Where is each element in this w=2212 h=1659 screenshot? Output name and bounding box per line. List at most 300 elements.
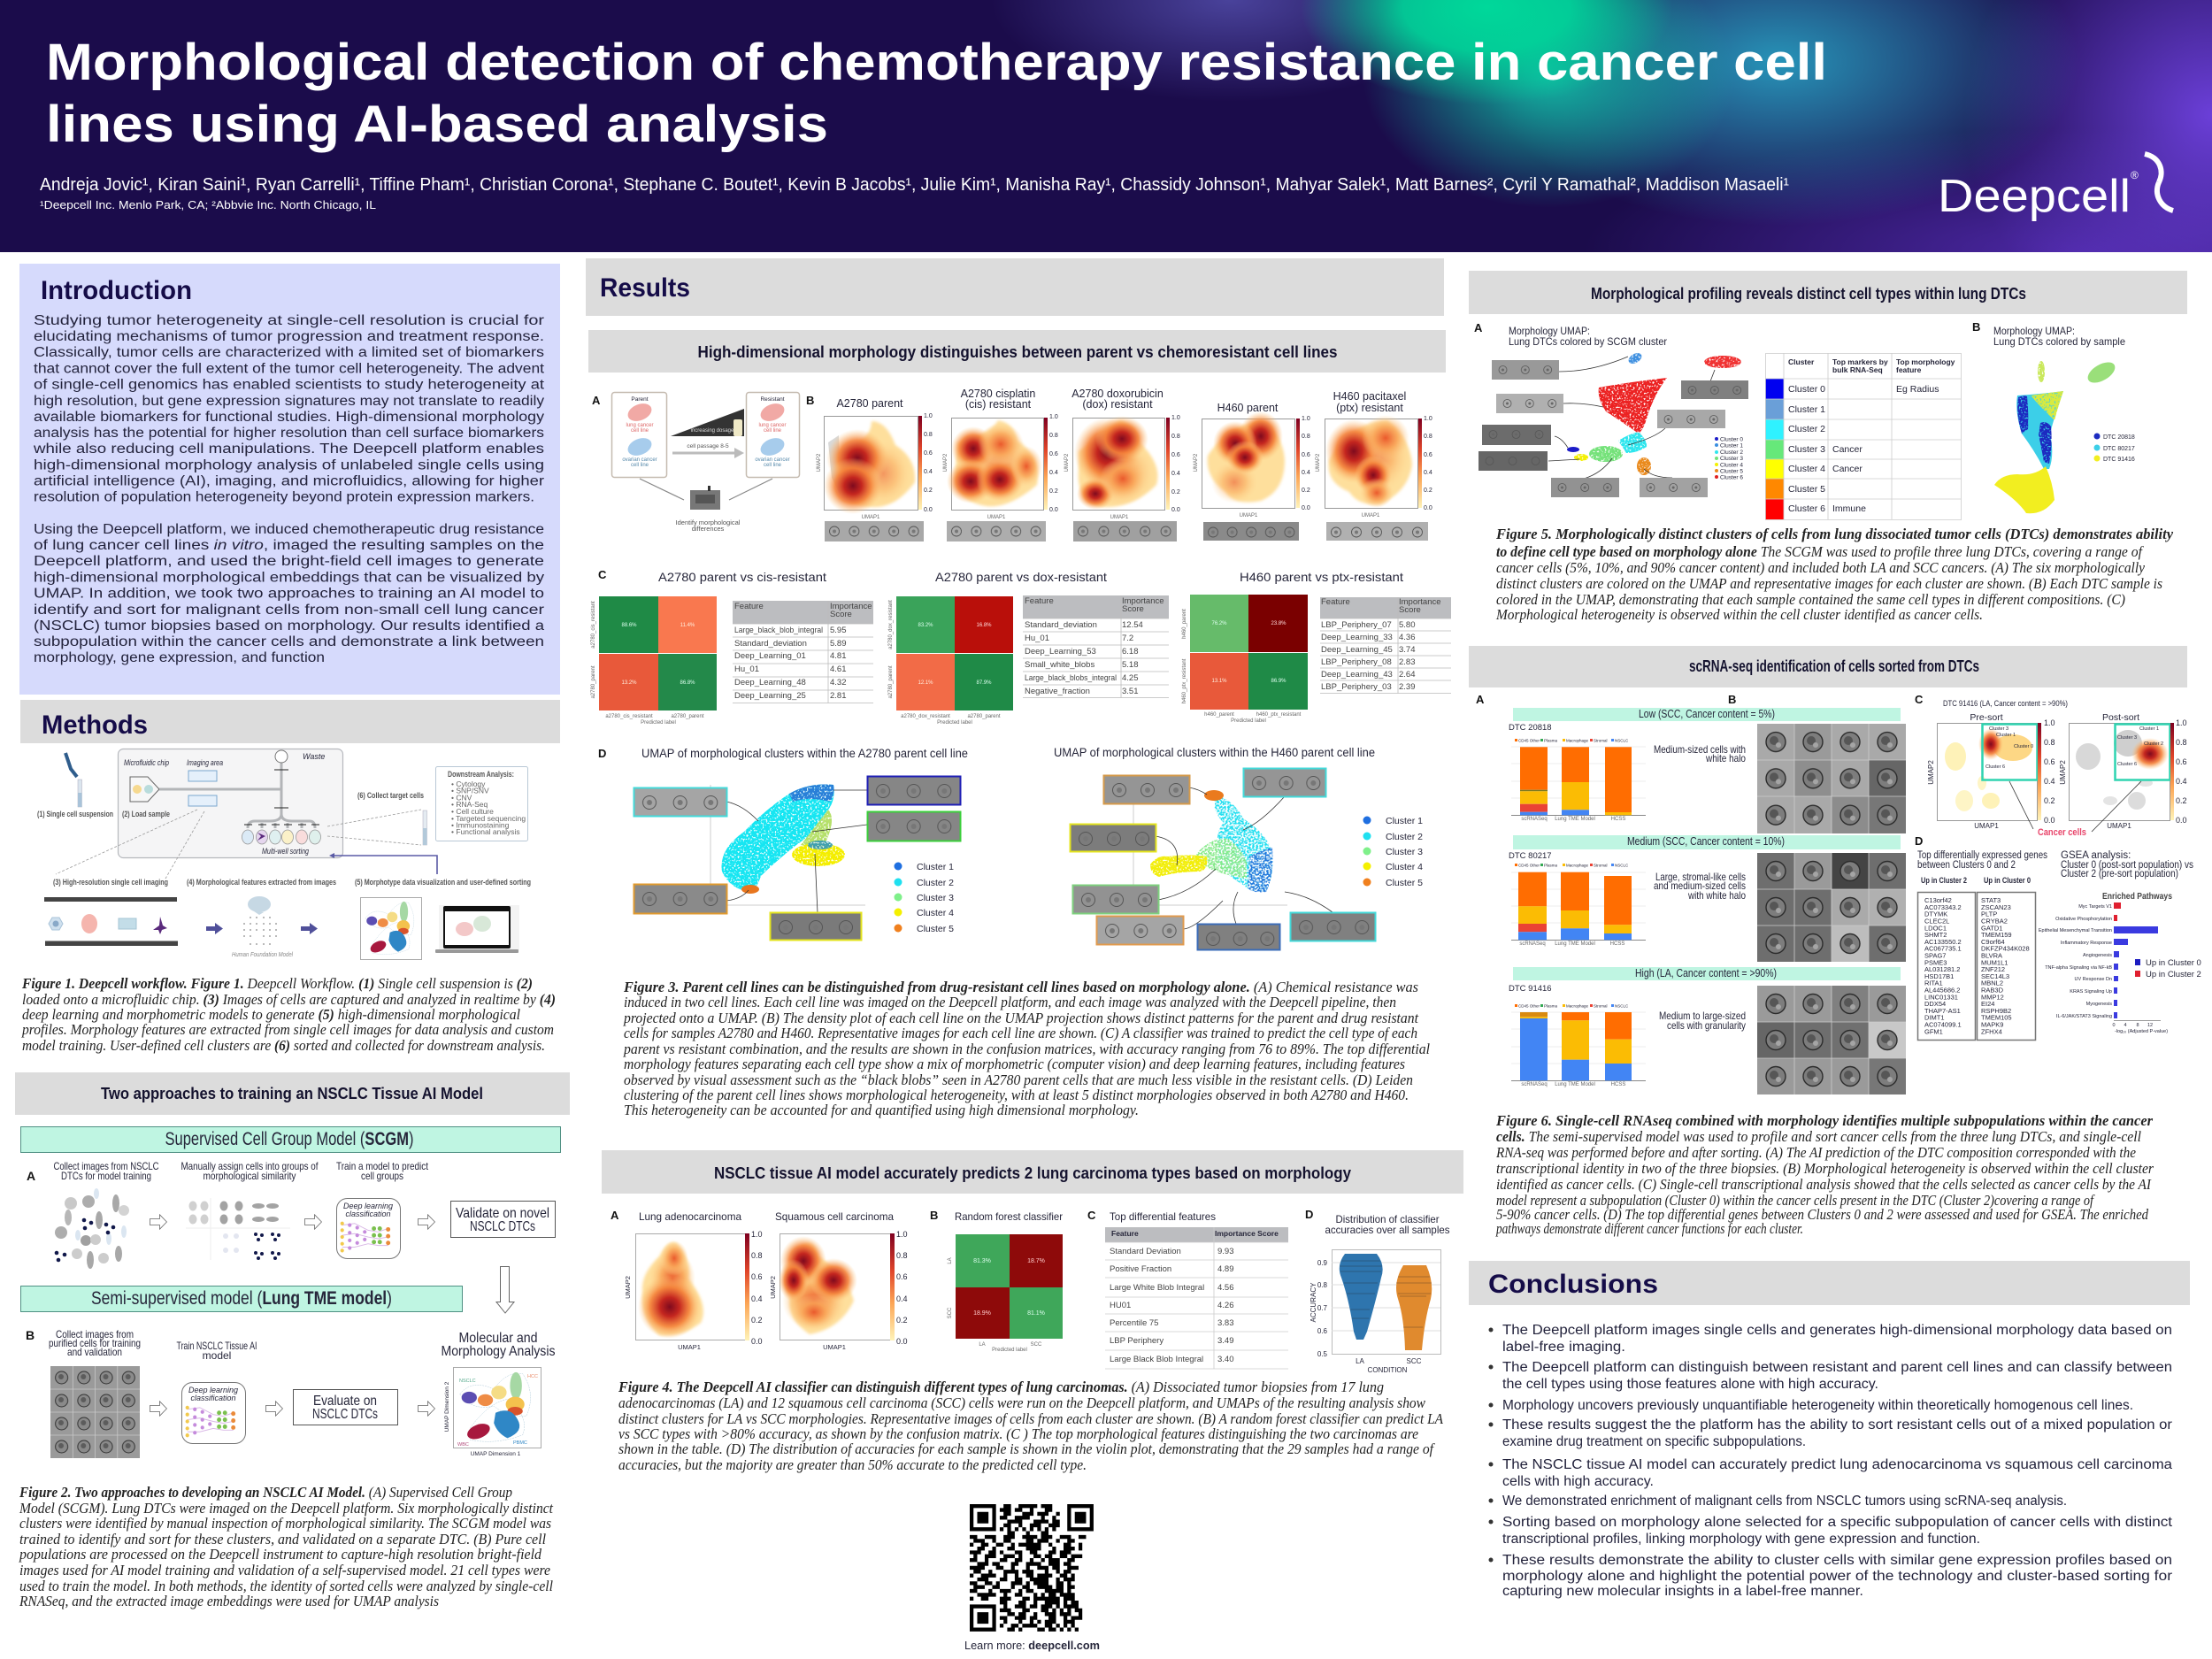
microfluidic chip: Microfluidic chip: [124, 758, 169, 767]
text block: conclusions: Sorting based on morphology alone selected for a specific subpopulation of cancer cells with distinct: [1502, 1515, 2173, 1530]
band: high-dimensional morphology: High-dimensional morphology distinguishes between parent vs chemoresistant cell lines: [697, 343, 1338, 361]
step captions B: [49, 1328, 556, 1362]
density: pre-sort: Cluster 3: [1989, 726, 2008, 732]
microfluidic chip: Imaging area: [187, 758, 223, 767]
gene list: cluster 0: [1977, 892, 2035, 1041]
panel D: violin plot: SCC: [1407, 1357, 1422, 1365]
scatter: A2780: [710, 784, 867, 913]
band: morphological profiling: [1469, 271, 2187, 314]
feature table 2: Score: [1122, 604, 1144, 614]
legend: H460: Cluster 3: [1386, 847, 1423, 857]
icon: brain and model: [232, 896, 293, 958]
text block: introduction: Deepcell platform, and used the bright-field cell images to generate: [34, 554, 544, 569]
feature table 2: 12.54: [1122, 620, 1143, 630]
panel C: pre and post sort: Post-sort: [2102, 712, 2139, 723]
feature table 2: 3.51: [1122, 687, 1138, 696]
panel A: density plots: 0.2: [751, 1316, 763, 1325]
panel C: top features table: Importance Score: [1215, 1229, 1279, 1238]
confusion matrix 2: [888, 596, 1013, 726]
panel D: violin plot: 0.7: [1317, 1304, 1328, 1312]
plot: A2780 doxorubicin resistant: (dox) resistant: [1082, 398, 1153, 411]
downstream analysis box: [435, 766, 527, 841]
gene list: cluster 0: PLTP: [1981, 910, 1997, 918]
panel C: top features table: 9.93: [1217, 1247, 1233, 1256]
legend: H460: Cluster 5: [1386, 878, 1423, 888]
row: low cancer content: CD45 Other: [1518, 738, 1540, 743]
panel C: top features table: Positive Fraction: [1110, 1264, 1171, 1274]
text block: introduction: high resolution, but gene expression signatures may not translate to readily: [34, 394, 544, 409]
gene list: cluster 2: LINC01331: [1924, 993, 1958, 1001]
caption: figure 3: projected onto a UMAP. (B) The density plot of each cell line on the UMAP projection shows distinct patterns for the parent and drug resistant: [623, 1010, 1418, 1026]
panel D: gene lists and GSEA: Cluster 2 (pre-sort population): [2061, 869, 2178, 879]
validate box: [451, 1202, 556, 1237]
caption: figure 5: Morphological heterogeneity is observed within the cell cluster identified as cancer cells.: [1495, 606, 1983, 623]
density: post-sort: UMAP1: [2107, 822, 2131, 830]
caption: figure 1: deep learning and morphometric models to generate (5) high-dimensional morphological: [22, 1006, 520, 1023]
feature table 2: 6.18: [1122, 647, 1138, 657]
confusion matrix 1: 88.6%: [621, 623, 637, 628]
plot: A2780 doxorubicin resistant: [1064, 388, 1180, 541]
feature table 3: LBP_Periphery_07: [1321, 620, 1392, 630]
gene list: cluster 0: DKFZP434K028: [1981, 945, 2030, 953]
legend: A2780: Cluster 1: [917, 862, 954, 872]
panel D: violin plot: 0.5: [1317, 1350, 1328, 1358]
row: high cancer content: Macrophage: [1566, 1003, 1589, 1009]
plot: A2780 cisplatin resistant: 1.0: [1049, 414, 1058, 420]
scatter: H460: [1133, 787, 1333, 929]
confusion matrix 2: 16.8%: [976, 623, 992, 628]
text block: introduction: UMAP. In addition, we took two approaches to training an AI model to: [34, 587, 544, 602]
confusion matrix 2: a2780_parent: [888, 665, 894, 699]
plot: H460 paclitaxel resistant: H460 pacitaxel: [1333, 390, 1406, 403]
caption: figure 4: shown in the table. (D) The distribution of accuracies for each sample is shown in the violin plot, demonstrating that the 29 samples had a range of: [618, 1440, 1435, 1457]
panel A: density plots: 0.4: [751, 1294, 763, 1303]
density: post-sort: 1.0: [2176, 718, 2187, 727]
plot: H460 paclitaxel resistant: [1316, 390, 1432, 541]
row: low cancer content: HCSS: [1611, 817, 1625, 822]
caption: figure 2: trained to identify and sort for these clusters, and validated on a separate DTC. (B) Pure cell: [19, 1531, 546, 1548]
gene list: cluster 0: MUM1L1: [1981, 958, 2008, 966]
caption: figure 2: Figure 2. Two approaches to developing an NSCLC AI Model. (A) Supervised Cell Group: [19, 1484, 512, 1501]
plot: A2780 parent: UMAP1: [862, 515, 880, 520]
confusion matrix 3: 76.2%: [1211, 621, 1227, 626]
feature table 3: Deep_Learning_45: [1321, 645, 1393, 655]
caption: figure 3: parent vs resistant combination, and the results are shown in the confusion matrices, with accuracy ranging from 76 to 89%. The top differential: [623, 1041, 1430, 1057]
plot: H460 paclitaxel resistant: 1.0: [1424, 416, 1432, 422]
panel labels: [1476, 693, 1924, 848]
figure 3 panel A: resistance schematic: ovarian cancer: [622, 457, 657, 463]
caption: figure 2: populations are processed on the Deepcell instrument to capture-high resolution bright-field: [19, 1546, 542, 1563]
row: medium cancer content: NSCLC: [1615, 864, 1629, 867]
density: post-sort: Cluster 6: [2117, 762, 2137, 767]
confusion matrix 3: h460_parent: [1182, 609, 1187, 639]
panel A: SCGM UMAP: A: [1474, 321, 1483, 334]
panel B: confusion matrix: SCC: [1031, 1342, 1042, 1348]
gene list: cluster 2: DDX54: [1924, 1000, 1946, 1008]
text block: introduction: analysis has the potential for higher resolution than cell surface biomarkers: [34, 426, 544, 441]
downstream analysis box: Downstream Analysis:: [448, 770, 514, 779]
title: [46, 34, 1827, 153]
cell image grid: [50, 1366, 140, 1458]
gene list: cluster 2: LDOC1: [1924, 924, 1947, 932]
confusion matrix 1: [591, 596, 717, 726]
panel B: confusion matrix: 18.7%: [1027, 1258, 1045, 1264]
umap plot: WBC: [457, 1442, 469, 1448]
text block: introduction: of single-cell genomics has enabled scientists to study heterogeneity at: [34, 378, 545, 393]
panel A: SCGM UMAP: Morphology UMAP:: [1509, 325, 1590, 337]
panel A: density plots: UMAP1: [678, 1343, 701, 1351]
arrow: [418, 1215, 435, 1229]
row: high cancer content: CD45 Other: [1518, 1003, 1540, 1009]
legend: H460: Cluster 1: [1386, 816, 1423, 826]
text block: conclusions: The Deepcell platform can distinguish between resistant and parent cell lines and can classify between: [1502, 1360, 2172, 1375]
plot: A2780 cisplatin resistant: [943, 388, 1058, 541]
callout: cancer cells: [2009, 781, 2141, 838]
gene list: cluster 2: DIMT1: [1924, 1014, 1945, 1022]
row: low cancer content: DTC 20818: [1509, 723, 1552, 733]
row: medium cancer content: and medium-sized cells: [1654, 879, 1746, 892]
panel B: sample UMAP: Lung DTCs colored by sample: [1993, 335, 2125, 348]
feature table 2: Feature: [1025, 596, 1054, 606]
panel C: top features table: Large White Blob Integral: [1110, 1283, 1204, 1293]
confusion matrix 3: Predicted label: [1231, 718, 1266, 724]
caption: figure 3: [623, 979, 1430, 1118]
panel B: confusion matrix: B: [930, 1209, 938, 1222]
plot: A2780 cisplatin resistant: UMAP2: [943, 453, 949, 472]
chart: enriched pathways: Myogenesis: [2086, 1002, 2112, 1007]
gene list: cluster 2: CLEC2L: [1924, 917, 1949, 926]
confusion matrix 2: Predicted label: [937, 720, 972, 726]
row: high cancer content: NSCLC: [1615, 1003, 1629, 1009]
title: lines using AI-based analysis: [46, 96, 828, 153]
feature table 3: Importance: [1399, 597, 1441, 607]
panel B: sample UMAP: Morphology UMAP:: [1993, 325, 2075, 337]
chart: enriched pathways: Up in Cluster 2: [2146, 970, 2201, 979]
umap plot: [444, 1368, 541, 1457]
plot: H460 paclitaxel resistant: 0.0: [1424, 505, 1432, 511]
panel B: confusion matrix: 18.9%: [973, 1310, 991, 1317]
panel B: sample UMAP: B: [1972, 320, 1980, 334]
plot: A2780 parent: 0.0: [924, 507, 933, 513]
legend: H460: Cluster 4: [1386, 862, 1423, 872]
figure 3 panel A: resistance schematic: ovarian cancer: [755, 457, 790, 463]
cluster table: Immune: [1832, 503, 1866, 514]
plot: H460 parent: H460 parent: [1217, 402, 1279, 414]
deep learning box B: [182, 1382, 246, 1444]
panel C: top features table: 3.49: [1217, 1336, 1233, 1346]
plot: A2780 doxorubicin resistant: 0.0: [1171, 507, 1180, 513]
feature table 3: 5.80: [1399, 620, 1416, 630]
figure 3 panel C: classifiers: C: [598, 568, 607, 581]
figure 3 panel C: classifiers: [591, 568, 1451, 726]
panel C: pre and post sort: [1927, 699, 2187, 838]
panel A: density plots: 0.0: [896, 1337, 908, 1346]
gene list: cluster 2: AC133550.2: [1924, 938, 1962, 946]
panel B: confusion matrix: SCC: [948, 1307, 953, 1318]
caption: figure 1: [21, 975, 556, 1054]
confusion matrix 2: a2780_dox_resistant: [901, 714, 950, 719]
figure 3 panel D: clusters: D: [598, 747, 606, 760]
gene list: cluster 0: TMEM105: [1981, 1014, 2012, 1022]
step captions B: Molecular and: [458, 1331, 538, 1346]
plot: A2780 doxorubicin resistant: 0.8: [1171, 434, 1180, 440]
figure 3 panel A: resistance schematic: cell passage 8-5: [687, 443, 729, 449]
row: medium cancer content: DTC 80217: [1509, 851, 1552, 861]
cluster table: Cancer: [1832, 464, 1863, 474]
figure 3 panel A: resistance schematic: Identify morphological: [676, 518, 741, 526]
arrows: pipeline: [206, 923, 318, 934]
text block: introduction: Classically, tumor cells are characterized with a limited set of biomarkers: [34, 345, 544, 360]
cluster table: Cluster 3: [1788, 444, 1825, 455]
legend: Cluster 2: [1720, 449, 1743, 456]
feature table 3: 3.74: [1399, 645, 1416, 655]
panel B: confusion matrix: Random forest classifier: [955, 1210, 1063, 1223]
panel C: top features table: Feature: [1111, 1229, 1139, 1238]
affiliations: ¹Deepcell Inc. Menlo Park, CA; ²Abbvie Inc. North Chicago, IL: [40, 198, 376, 211]
panel A: density plots: Squamous cell carcinoma: [775, 1210, 894, 1223]
band: SCGM: [21, 1127, 561, 1152]
panel D: violin plot: D: [1305, 1208, 1313, 1221]
tube: collected cells: [423, 810, 426, 845]
caption: figure 1: profiles. Morphology features are extracted from single cell images for data analysis and custom: [21, 1021, 554, 1038]
caption: figure 2: used to train the model. In both methods, the identity of sorted cells were analyzed by single-cell: [19, 1578, 553, 1594]
chart: enriched pathways: 0: [2112, 1023, 2116, 1028]
panel D: gene lists and GSEA: [1917, 850, 2201, 1041]
panel: results heading: [586, 258, 1444, 316]
cluster table: Cluster 2: [1788, 424, 1825, 434]
plot: A2780 parent: 0.6: [924, 450, 933, 457]
laptop: [435, 905, 519, 953]
feature table 2: 7.2: [1122, 634, 1133, 643]
panel D: violin plot: CONDITION: [1368, 1366, 1408, 1374]
microfluidic chip: Multi-well sorting: [262, 847, 309, 856]
panel B: confusion matrix: [930, 1209, 1063, 1353]
titles: H460 parent vs ptx-resistant: [1240, 570, 1403, 584]
feature table 1: Large_black_blob_integral: [734, 626, 823, 635]
cell mixture illustration: [55, 1188, 129, 1269]
panel D: gene lists and GSEA: GSEA analysis:: [2061, 850, 2131, 861]
gene list: cluster 2: AL445686.2: [1924, 986, 1960, 995]
gene list: cluster 0: BLVRA: [1981, 952, 2002, 959]
feature table 2: Standard_deviation: [1025, 620, 1097, 630]
feature table 1: Hu_01: [734, 664, 759, 674]
cluster table: Top morphology: [1896, 357, 1955, 366]
panel A: density plots: A: [611, 1209, 619, 1222]
confusion matrix 1: a2780_cis_resistant: [605, 714, 653, 719]
chart: enriched pathways: Enriched Pathways: [2102, 892, 2172, 902]
arrow: [150, 1215, 166, 1229]
plot: H460 parent: 0.4: [1302, 470, 1310, 476]
cluster table: Cluster 5: [1788, 484, 1825, 495]
step captions B: Train NSCLC Tissue AI: [177, 1340, 257, 1352]
row: low cancer content: white halo: [1705, 752, 1746, 764]
deep learning box A: [336, 1198, 400, 1258]
feature table 2: Hu_01: [1025, 634, 1049, 643]
panel D: violin plot: ACCURACY: [1310, 1282, 1317, 1322]
gene list: cluster 2: SPAG7: [1924, 952, 1946, 959]
panel labels: D: [1915, 834, 1923, 848]
evaluate box: [294, 1389, 398, 1425]
row: high cancer content: High (LA, Cancer content = >90%): [1635, 967, 1777, 979]
panel D: gene lists and GSEA: Top differentially expressed genes: [1917, 850, 2047, 861]
panel A: density plots: 0.2: [896, 1316, 908, 1325]
caption: figure 6: 5-90% cancer cells. (D) The top differential genes between Clusters 0 and 2 were assessed and used for GSEA. The enriched: [1496, 1206, 2149, 1223]
gene list: cluster 0: MAPK9: [1981, 1021, 2003, 1028]
icon: pipette and tube: [65, 753, 81, 807]
panel: two approaches heading: [15, 1072, 570, 1115]
panel D: gene lists and GSEA: Cluster 0 (post-sort population) vs: [2061, 860, 2193, 871]
chart: enriched pathways: 4: [2124, 1023, 2127, 1028]
panel: two approaches heading: Two approaches to training an NSCLC Tissue AI Model: [101, 1085, 483, 1102]
confusion matrix 1: 86.8%: [680, 680, 695, 686]
feature table 2: Large_black_blobs_integral: [1025, 673, 1117, 683]
panel A: density plots: 0.6: [751, 1272, 763, 1281]
feature table 2: Deep_Learning_53: [1025, 647, 1096, 657]
caption: figure 3: Figure 3. Parent cell lines can be distinguished from drug-resistant cell lines based on morphology alone. (A) Chemical resistance was: [623, 979, 1418, 995]
feature table 1: [733, 601, 873, 703]
plot: A2780 parent: 0.8: [924, 432, 933, 438]
band: lung TME: Semi-supervised model (Lung TME model): [91, 1288, 392, 1309]
deep learning box A: classification: [345, 1210, 391, 1218]
plot: H460 parent: 0.6: [1302, 452, 1310, 458]
caption: figure 4: Figure 4. The Deepcell AI classifier can distinguish different types of lung carcinomas. (A) Dissociated tumor biopsies from 17 lung: [618, 1379, 1384, 1395]
gene list: cluster 2: AC067735.1: [1924, 945, 1962, 953]
gene list: cluster 0: RSPH9B2: [1981, 1007, 2011, 1015]
text block: conclusions: Morphology uncovers previously unquantifiable heterogeneity within theoretically homogenous cell lines.: [1502, 1398, 2133, 1413]
density: pre-sort: [1927, 718, 2055, 830]
row: low cancer content: Low (SCC, Cancer content = 5%): [1639, 708, 1775, 720]
figure 3 panel A: resistance schematic: increasing dosage: [691, 428, 734, 434]
caption: figure 3: morphology features separating each cell type show a mix of morphometric (computer vision) and deep learning features, including features: [624, 1056, 1405, 1072]
imaging channel: [44, 897, 178, 946]
label B: B: [26, 1328, 35, 1342]
confusion matrix 1: 13.2%: [621, 680, 637, 686]
text block: conclusions: cells with high accuracy.: [1502, 1474, 1654, 1489]
gene list: cluster 2: AC073343.2: [1924, 903, 1962, 911]
panel B: sample UMAP: DTC 91416: [2103, 457, 2135, 463]
step captions B: purified cells for training: [49, 1337, 141, 1349]
gene list: cluster 0: C9orf64: [1981, 938, 2005, 946]
chart: enriched pathways: [2039, 892, 2201, 1034]
step labels: (4) Morphological features extracted from images: [187, 878, 336, 887]
caption: figure 5: distinct clusters are colored on the UMAP and representative images for each cluster are shown. (B) Each DTC sample is: [1496, 575, 2162, 592]
panel B: sample UMAP: DTC 20818: [2103, 434, 2135, 441]
feature table 3: Feature: [1321, 597, 1350, 607]
figure 3 panel A: resistance schematic: cell line: [631, 428, 649, 434]
cluster table: Cluster 4: [1788, 464, 1825, 474]
cluster table: Top markers by: [1832, 357, 1888, 366]
plot: H460 paclitaxel resistant: 0.2: [1424, 488, 1432, 494]
feature table 1: Feature: [734, 602, 764, 611]
figure 3 panel B: density plots: [806, 388, 1432, 541]
confusion matrix 3: h460_parent: [1204, 712, 1234, 718]
plot: A2780 cisplatin resistant: UMAP1: [987, 515, 1006, 520]
arrow: [304, 1215, 322, 1229]
cluster table: [1765, 353, 1961, 520]
deep learning box B: Deep learning: [188, 1386, 238, 1394]
panel A: density plots: UMAP2: [769, 1276, 777, 1299]
band: scRNA-seq: [1469, 646, 2187, 687]
row: low cancer content: Medium-sized cells with: [1654, 743, 1746, 756]
text block: introduction: identify and sort for malignant cells from non-small cell lung cancer: [34, 603, 544, 618]
panel D: gene lists and GSEA: Up in Cluster 2: [1921, 876, 1967, 885]
feature table 1: Importance: [830, 602, 872, 611]
panel labels: C: [1915, 693, 1924, 706]
feature table 1: 5.89: [830, 639, 846, 649]
panel D: gene lists and GSEA: Up in Cluster 0: [1984, 876, 2031, 885]
caption: figure 6: Figure 6. Single-cell RNAseq combined with morphology identifies multiple subpopulations within the cancer: [1495, 1112, 2154, 1129]
figure 3 panel A: resistance schematic: [592, 393, 800, 533]
plot: A2780 cisplatin resistant: 0.2: [1049, 488, 1058, 495]
band: high-dimensional morphology: [588, 330, 1446, 373]
feature table 2: [1023, 595, 1169, 697]
step labels: (1) Single cell suspension: [37, 810, 113, 819]
feature table 3: LBP_Periphery_03: [1321, 682, 1392, 692]
downstream analysis box: • SNP/SNV: [451, 786, 489, 795]
image grid: medium: [1757, 853, 1906, 962]
panel: results heading: Results: [600, 273, 690, 303]
titles: A2780 parent vs cis-resistant: [658, 570, 826, 584]
confusion matrix 2: a2780_parent: [967, 714, 1001, 719]
gene list: cluster 2: RITA1: [1924, 979, 1943, 987]
caption: figure 1: model training. User-defined cell clusters are (6) sorted and collected for downstream analysis.: [22, 1037, 545, 1054]
gene list: cluster 0: EI24: [1981, 1000, 1994, 1008]
gene list: cluster 2: GFM1: [1924, 1027, 1943, 1035]
row: medium cancer content: Lung TME Model: [1555, 941, 1595, 947]
plot: H460 parent: UMAP2: [1194, 453, 1199, 472]
feature table 2: Small_white_blobs: [1025, 660, 1094, 670]
chart: enriched pathways: IL-6/JAK/STAT3 Signaling: [2056, 1014, 2112, 1019]
chart: enriched pathways: -log₁₀ (Adjusted P-value): [2115, 1029, 2168, 1034]
gene list: cluster 0: MMP12: [1981, 993, 2004, 1001]
caption: figure 2: clusters were identified by manual inspection of morphological similarity. The SCGM model was: [19, 1515, 551, 1532]
figure 6: [1476, 693, 2201, 1094]
text block: conclusions: The NSCLC tissue AI model can accurately predict lung adenocarcinoma vs squamous cell carcinoma: [1502, 1457, 2172, 1472]
panel B: sample UMAP: DTC 80217: [2103, 446, 2135, 452]
caption: figure 5: to define cell type based on morphology alone The SCGM was used to profile three lung DTCs, covering a range of: [1496, 543, 2144, 560]
caption: figure 4: distinct clusters for LA vs SCC morphologies. Representative images of cells from each cluster are shown. (B) A random forest classifier can predict LA: [618, 1410, 1444, 1427]
panel C: top features table: [1087, 1209, 1288, 1369]
figure 2: [21, 1127, 561, 1458]
learn more text: Learn more: deepcell.com: [964, 1639, 1100, 1652]
text block: introduction: morphology, gene expression, and function: [34, 650, 325, 665]
panel: methods heading: [20, 700, 560, 743]
density: pre-sort: 0.6: [2044, 757, 2055, 766]
confusion matrix 3: h460_ptx_resistant: [1182, 658, 1187, 703]
caption: figure 1: Figure 1. Deepcell workflow. Figure 1. Deepcell Workflow. (1) Single cell suspension is (2): [21, 975, 533, 992]
legend: Cluster 1: [1720, 442, 1743, 449]
panel: conclusions heading: Conclusions: [1488, 1270, 1658, 1299]
chart: enriched pathways: 8: [2136, 1023, 2139, 1028]
feature table 1: Deep_Learning_01: [734, 651, 806, 661]
title: H460 clusters: UMAP of morphological clusters within the H460 parent cell line: [1054, 746, 1375, 759]
plot: H460 parent: UMAP1: [1240, 513, 1258, 518]
plot: A2780 cisplatin resistant: 0.0: [1049, 507, 1058, 513]
plot: A2780 doxorubicin resistant: UMAP2: [1064, 453, 1070, 472]
step captions B: model: [203, 1349, 231, 1362]
panel C: top features table: Large Black Blob Integral: [1110, 1355, 1203, 1364]
legend: Cluster 6: [1720, 474, 1743, 481]
plot: A2780 cisplatin resistant: (cis) resistant: [965, 398, 1032, 411]
microfluidic chip: [119, 749, 343, 858]
arrow: [150, 1402, 166, 1416]
text block: introduction: high-dimensional morphology analysis of unlabeled single cells using: [34, 457, 544, 472]
feature table 1: Standard_deviation: [734, 639, 807, 649]
row: medium cancer content: Large, stromal-like cells: [1655, 871, 1746, 883]
confusion matrix 1: Predicted label: [641, 720, 676, 726]
gene list: cluster 0: MBNL2: [1981, 979, 2003, 987]
step labels: [37, 791, 531, 887]
